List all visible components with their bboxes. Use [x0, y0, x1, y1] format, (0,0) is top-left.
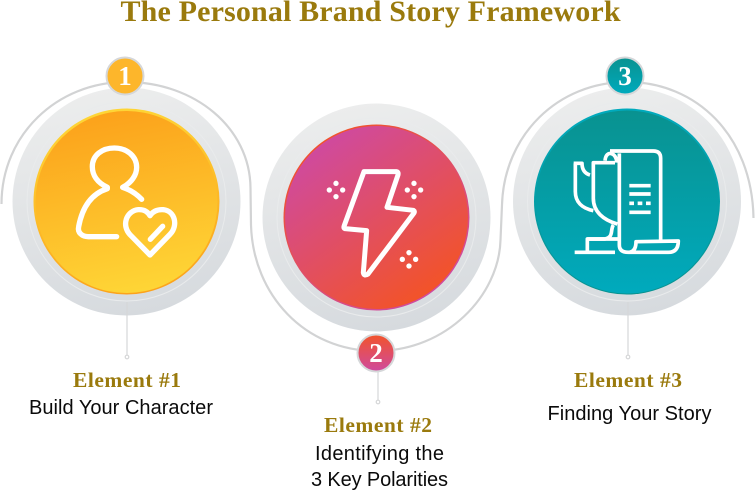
- icon: trophy and scroll: [574, 151, 678, 252]
- pink disc 2: [284, 124, 470, 310]
- label: element 1: Element #1: [73, 368, 181, 392]
- icon: person with heart: [78, 148, 175, 255]
- badge 3: [606, 58, 644, 94]
- badge 2: 2: [369, 338, 383, 368]
- panel: element 3: [513, 88, 741, 316]
- leader line 3: [626, 302, 630, 359]
- outer grey ring 3: [513, 88, 741, 316]
- outer grey ring 2: [262, 104, 490, 332]
- badge 2: [358, 334, 394, 372]
- label: element 2: Identifying the: [315, 443, 444, 465]
- label: element 2: [311, 413, 448, 490]
- label: element 1: Build Your Character: [29, 397, 213, 419]
- panel: element 2: [262, 104, 490, 332]
- label: element 3: Finding Your Story: [548, 403, 712, 425]
- connector arc path: [2, 82, 754, 351]
- leader line 2: [376, 372, 380, 404]
- orange disc 1: [34, 108, 220, 294]
- leader line 1: [125, 302, 129, 359]
- panel: element 1: [12, 88, 240, 316]
- label: element 3: [548, 368, 712, 425]
- badge 1: [106, 58, 144, 94]
- label: element 2: Element #2: [324, 413, 432, 437]
- label: element 1: [29, 368, 213, 419]
- outer grey ring 1: [12, 88, 240, 316]
- icon: lightning bolt with sparkles: [327, 172, 423, 275]
- badge 1: 1: [118, 61, 132, 91]
- badge 3: 3: [618, 61, 632, 91]
- label: element 3: Element #3: [574, 368, 682, 392]
- teal disc 3: [534, 108, 720, 294]
